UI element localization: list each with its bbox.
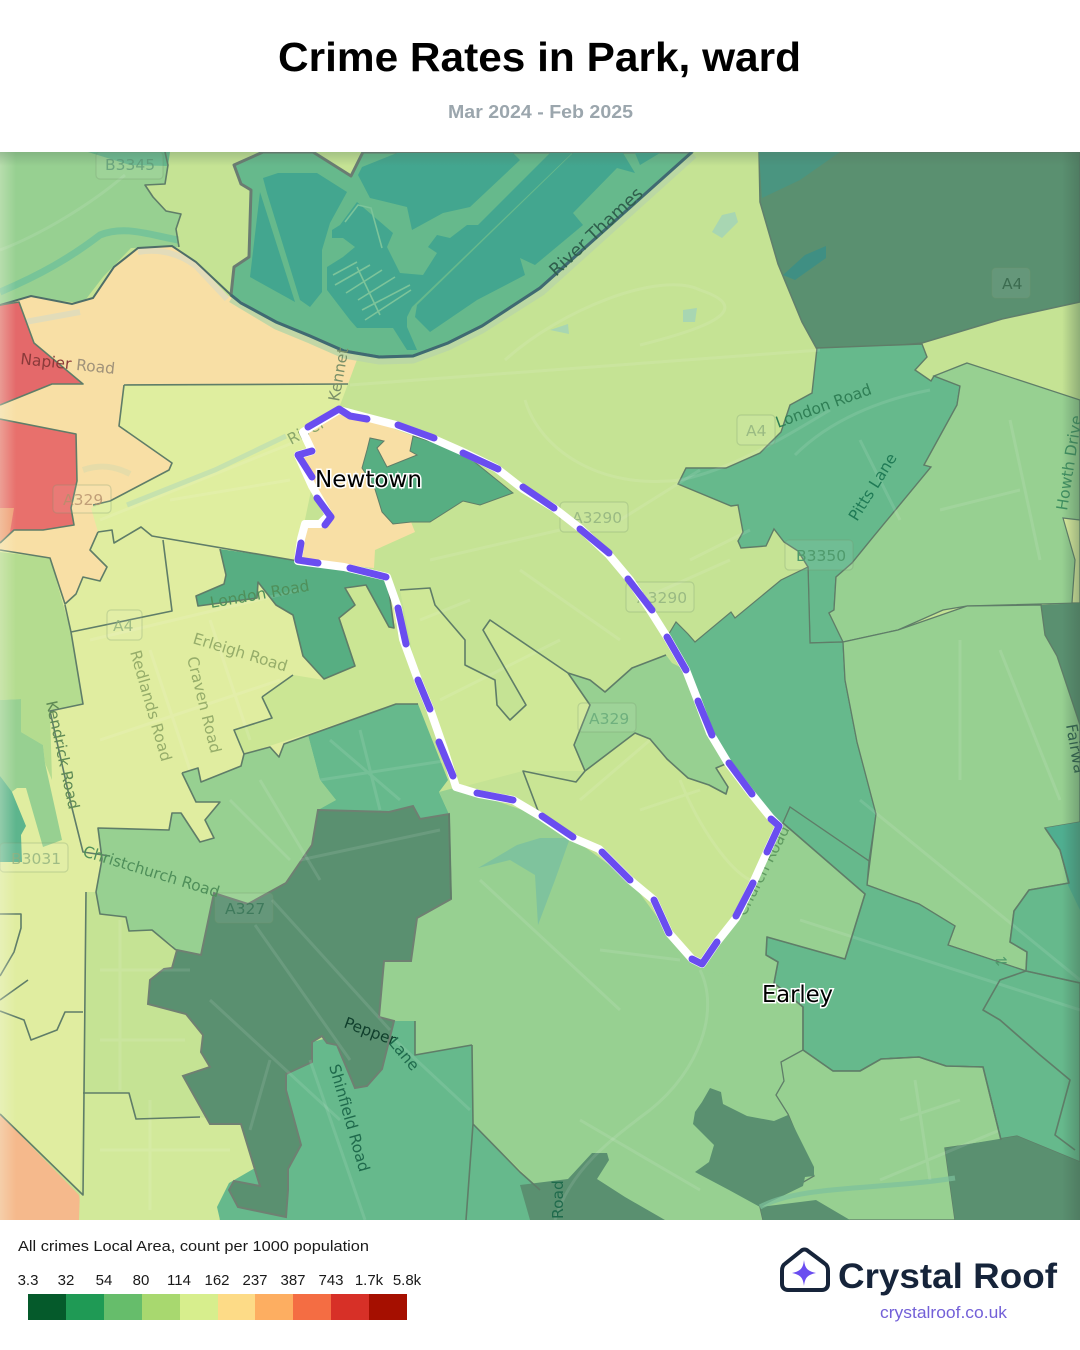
area: pale yellow south-west (0, 527, 420, 1195)
road labels: Shinfield Road (325, 1062, 373, 1174)
road shield: A3290 north: A3290 (572, 509, 622, 527)
white outline (298, 410, 779, 964)
road shield: A327 (215, 893, 273, 923)
area: peach north-west (0, 246, 358, 604)
ward area: mid-light green centre (568, 655, 728, 794)
legend title: All crimes Local Area, count per 1000 population (18, 1238, 369, 1255)
area: dark south centre (520, 1153, 665, 1220)
area: field by Church Road (700, 823, 865, 983)
area: teal far left (0, 776, 26, 862)
legend tick labels: 32 (58, 1272, 74, 1289)
area: teal east edge (1045, 822, 1080, 910)
road shield: A3290 south (626, 582, 694, 612)
area: pale yellow west (91, 384, 348, 561)
road shield: B3350: B3350 (796, 547, 846, 565)
area: south centre mid-light green (380, 788, 812, 1220)
area: green Shinfield Road (217, 1021, 540, 1220)
road shield: A327: A327 (225, 900, 265, 918)
stream along river (0, 231, 178, 292)
logo (782, 1250, 1057, 1322)
area: dark north-east (759, 152, 1080, 353)
legend colour scale (28, 1294, 407, 1320)
map base (0, 152, 1080, 1220)
legend tick labels: 5.8k (393, 1272, 422, 1289)
road labels: Redlands Road (126, 648, 175, 763)
pond: north-east (759, 152, 840, 198)
rail station symbol: ⇌ (995, 952, 1008, 970)
road labels: Craven Road (183, 655, 225, 755)
road labels: Road (549, 1180, 567, 1219)
area: light green left column (0, 552, 83, 780)
lake: marina (327, 153, 572, 350)
road shield: B3345: B3345 (105, 156, 155, 174)
road shield: A329 west (53, 485, 111, 513)
area: red south (0, 419, 77, 543)
area: orange sliver (0, 508, 14, 543)
legend tick labels: 1.7k (355, 1272, 384, 1289)
river Kennet band (127, 436, 286, 505)
road shield: A3290 north (560, 502, 628, 532)
legend (18, 1238, 422, 1320)
map edge fade (0, 152, 1080, 1220)
road shield: A4 west (107, 610, 142, 640)
area: pale yellow east edge (1063, 518, 1080, 603)
title: Crime Rates in Park, ward (278, 34, 801, 80)
road shield: A4 north east: A4 (1002, 275, 1022, 293)
legend tick labels: 743 (318, 1272, 344, 1289)
road labels: River (284, 413, 329, 449)
road shield: A329 south (578, 703, 636, 732)
legend tick labels: 54 (96, 1272, 112, 1289)
place label: Earley: Earley (762, 982, 833, 1008)
road labels: London Road (209, 577, 311, 612)
area: London Road east green (678, 344, 960, 643)
place label: Newtown: Newtown (315, 467, 422, 493)
area: green east of ward (667, 567, 876, 861)
area: dark blob south (693, 1088, 850, 1220)
area: dark green central (148, 806, 451, 1217)
area: dark south-east (945, 1136, 1080, 1220)
area: south-east light green (760, 1050, 1001, 1220)
legend tick labels: 387 (280, 1272, 306, 1289)
roads (0, 175, 1080, 1220)
area: top edge green patch (88, 152, 170, 166)
road shield: B3031 (0, 843, 68, 872)
area: orange bottom left (0, 1114, 83, 1220)
brand name: Crystal Roof (838, 1257, 1057, 1296)
road shield: B3031: B3031 (11, 850, 61, 868)
area: east large green (829, 363, 1080, 642)
road labels: London Road (773, 380, 874, 432)
marina jetties (333, 205, 411, 320)
legend tick labels: 3.3 (18, 1272, 38, 1289)
lake: west (263, 173, 347, 307)
area: east lower green (843, 605, 1080, 971)
legend tick labels (18, 1272, 422, 1289)
icon: house with crystal (782, 1250, 828, 1290)
road labels: River Thames (546, 184, 647, 281)
ward boundary (298, 409, 779, 964)
pond: small (783, 246, 826, 280)
subtitle: date range: Mar 2024 - Feb 2025 (448, 102, 633, 122)
road labels (20, 184, 1080, 1235)
road labels: Kendrick Road (42, 699, 83, 811)
road shield: A3290 south: A3290 (637, 589, 687, 607)
lake: east (415, 153, 635, 332)
road shield: A329 south: A329 (589, 710, 629, 728)
area: south-west light green lower (79, 1093, 262, 1220)
river bank north-west line (0, 246, 231, 305)
ward interior base (339, 412, 779, 964)
area: London Road dark green (196, 549, 394, 679)
pond: small teal patches (550, 212, 738, 334)
road labels: Christchurch Road (81, 843, 222, 901)
road labels: Erleigh Road (191, 630, 290, 675)
road shield: A4 centre (737, 415, 775, 445)
lake: top right (635, 153, 660, 165)
road labels: Church Road (733, 823, 793, 919)
area: south-east band green (766, 807, 1080, 1162)
road shield: A4 centre: A4 (746, 422, 766, 440)
lake: far west (250, 192, 295, 302)
purple dashes (298, 409, 779, 964)
website: crystalroof.co.uk (880, 1304, 1008, 1322)
road shield: A4 west: A4 (113, 617, 133, 635)
area: south-west light green upper (83, 892, 99, 1092)
pale strips on peach (25, 251, 227, 474)
boundary lines (0, 152, 1080, 1220)
legend tick labels: 80 (133, 1272, 149, 1289)
area: light green north of Redlands (234, 583, 422, 754)
ward area: pale inner (400, 588, 590, 788)
road labels: Kennet (325, 346, 352, 403)
river line (231, 152, 692, 357)
area: green south of ward edge (308, 704, 449, 819)
area: teal stream patch (478, 838, 570, 925)
area: dark east edge (1041, 603, 1080, 725)
area: green far east (1010, 883, 1080, 990)
river bank strip (231, 155, 694, 361)
area: top left green (0, 152, 181, 305)
road shield: B3345 (96, 152, 163, 179)
area: red north (0, 302, 83, 405)
road shield: B3350 (785, 540, 853, 570)
stream (760, 1178, 955, 1207)
legend tick labels: 237 (242, 1272, 268, 1289)
road labels: Napier Road (20, 350, 116, 378)
road labels: Pitts Lane (845, 450, 901, 524)
road labels: Pepper (342, 1014, 399, 1049)
legend tick labels: 114 (167, 1272, 191, 1289)
legend tick labels: 162 (204, 1272, 230, 1289)
lake: north (358, 153, 520, 230)
area: mid-light green Christchurch (96, 735, 336, 955)
ward area: southern light green (523, 733, 779, 964)
road labels: Lane (385, 1034, 423, 1074)
ward area: Newtown peach (298, 408, 417, 568)
area: green strip far left (0, 699, 62, 847)
road shield: A4 north east (992, 268, 1030, 298)
road shield: A329 west: A329 (63, 491, 103, 509)
ward area: dark green Newtown east (362, 436, 513, 524)
area: teal water block north of river (231, 152, 692, 357)
road labels: Cra (164, 1217, 191, 1235)
